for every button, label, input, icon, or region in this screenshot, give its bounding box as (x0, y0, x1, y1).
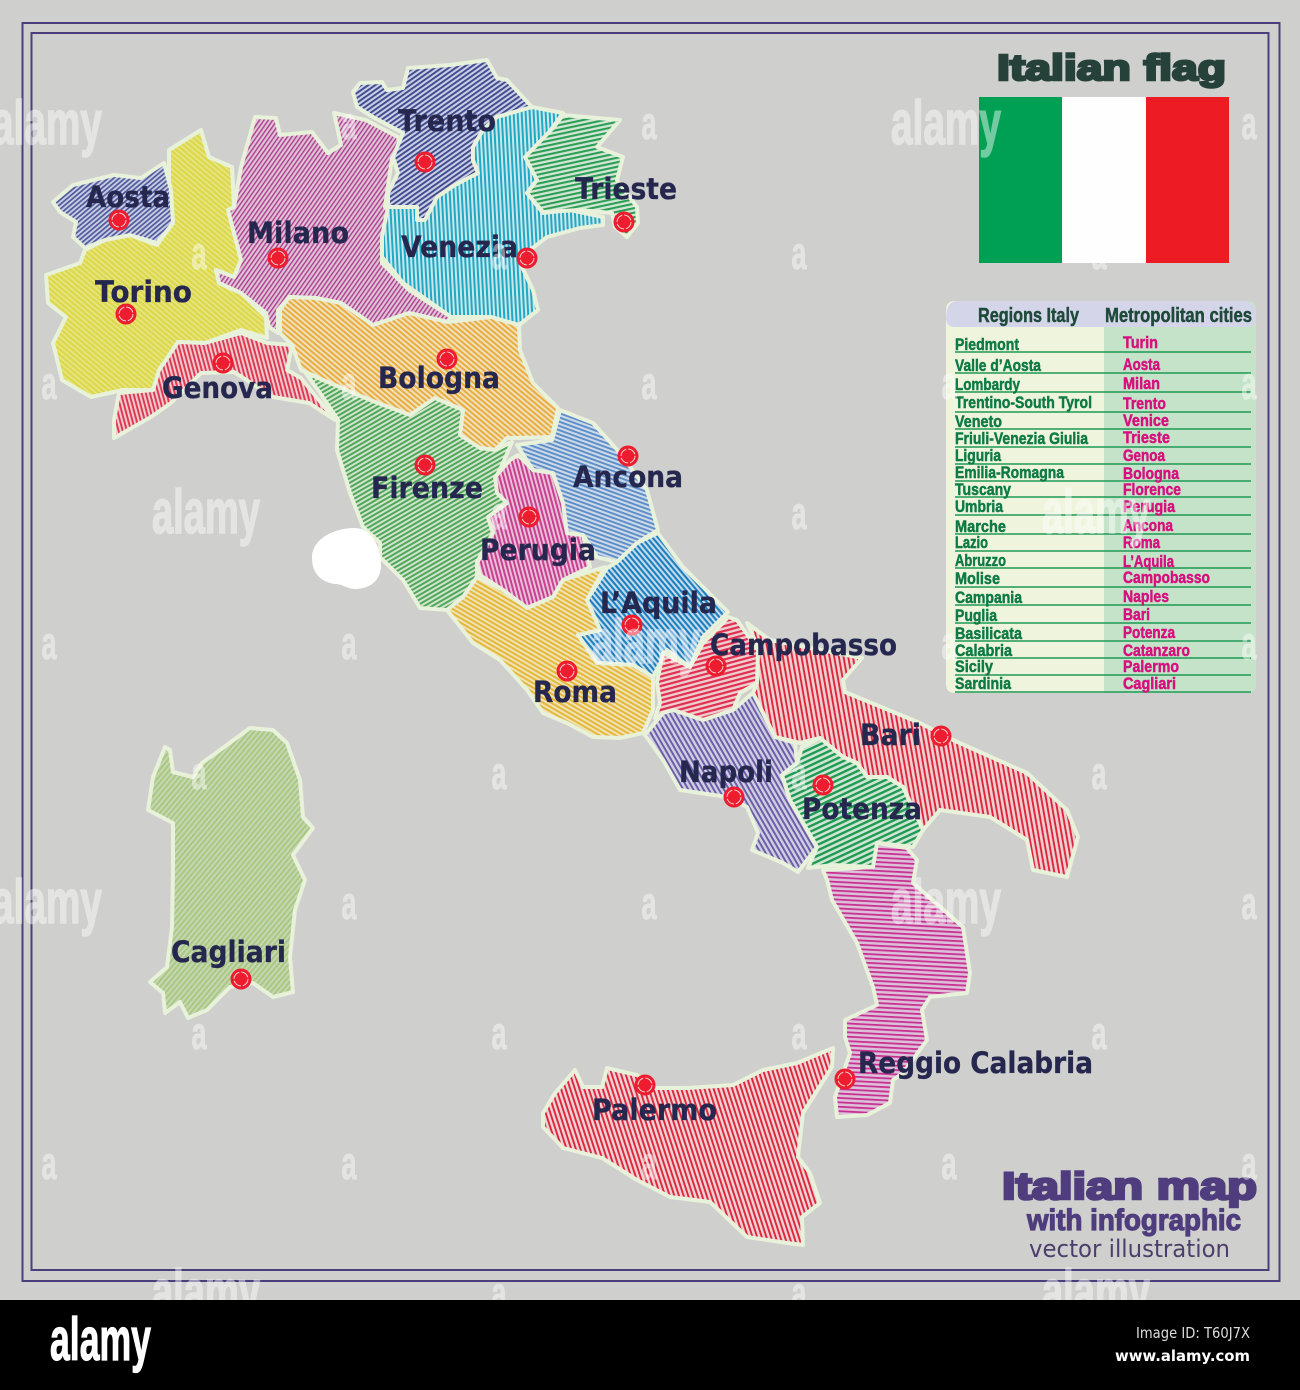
city: Ancona (573, 446, 683, 494)
city: Trento: Trento (398, 104, 496, 138)
row: Lombardy: Milan (1123, 374, 1160, 393)
region: Valle d'Aosta (53, 163, 173, 248)
watermark layer: a (1092, 747, 1107, 799)
title: Italian map: Italian map (1002, 1166, 1257, 1208)
city: Reggio Calabria: Reggio Calabria (858, 1046, 1093, 1080)
row: Sicily: Sicily (955, 657, 993, 676)
footer logo: alamy: alamy (50, 1306, 151, 1373)
row: Veneto (955, 411, 1251, 431)
row: Sicily: Palermo (1123, 657, 1179, 676)
city: Reggio Calabria (834, 1046, 1093, 1090)
watermark layer: a (942, 1137, 957, 1189)
city: Perugia: Perugia (480, 533, 596, 567)
row: Basilicata: Basilicata (955, 624, 1022, 643)
watermark layer: a (42, 357, 57, 409)
row: Emilia-Romagna (955, 463, 1251, 483)
watermark layer: a (1242, 1137, 1257, 1189)
Italian flag (979, 97, 1229, 263)
city: Genova: Genova (162, 371, 273, 405)
header: Metropolitan cities: Metropolitan cities (1105, 305, 1252, 327)
city: Potenza (802, 774, 922, 826)
row: Valle d'Aosta: Valle d’Aosta (955, 356, 1041, 375)
row: Lazio (955, 533, 1251, 552)
row: Tuscany: Tuscany (955, 480, 1011, 499)
city: Cagliari: Cagliari (171, 935, 286, 969)
watermark layer: a (642, 357, 657, 409)
region: Umbria (477, 455, 590, 608)
region: Tuscany (305, 372, 512, 610)
watermark layer: a (792, 487, 807, 539)
row: Puglia: Bari (1123, 605, 1150, 624)
watermark layer: a (192, 1007, 207, 1059)
row: Liguria: Liguria (955, 446, 1001, 465)
row: Molise (955, 568, 1251, 588)
row: Puglia: Puglia (955, 606, 997, 625)
row: Calabria (955, 641, 1251, 660)
row: Abruzzo: Abruzzo (955, 551, 1006, 570)
row: Lombardy (955, 374, 1251, 394)
region: Molise (655, 617, 758, 720)
row: Campania (955, 587, 1251, 607)
city: Firenze: Firenze (371, 471, 483, 505)
row: Marche (955, 516, 1251, 536)
row: Sardinia: Sardinia (955, 674, 1011, 693)
watermark layer: a (492, 1267, 507, 1319)
region: Friuli-Venezia Giulia (525, 115, 638, 237)
row: Valle d'Aosta (955, 355, 1251, 375)
city: L'Aquila (600, 586, 717, 636)
row: Emilia-Romagna: Bologna (1123, 464, 1179, 483)
table right background (1104, 301, 1256, 693)
city: Campobasso (706, 628, 897, 676)
city: Milano: Milano (247, 216, 349, 250)
watermark layer: a (42, 617, 57, 669)
watermark layer: a (792, 1267, 807, 1319)
region: Sicily (543, 1048, 833, 1245)
row: Tuscany: Florence (1123, 480, 1181, 499)
city: Campobasso: Campobasso (710, 628, 897, 662)
watermark layer: alamy (1042, 1258, 1150, 1327)
watermark layer: a (1242, 357, 1257, 409)
watermark layer: a (942, 357, 957, 409)
row: Marche: Ancona (1123, 516, 1173, 535)
watermark layer: a (642, 877, 657, 929)
row: Campania: Naples (1123, 587, 1169, 606)
row: Trentino-South Tyrol (955, 393, 1251, 413)
footer band (0, 1300, 1300, 1390)
city: Perugia (480, 506, 596, 567)
city: Aosta: Aosta (86, 180, 170, 214)
row: Basilicata (955, 623, 1251, 643)
region: Abruzzo (578, 533, 728, 677)
row: Calabria: Calabria (955, 641, 1012, 660)
city: Trento (398, 104, 496, 172)
row: Marche: Marche (955, 517, 1006, 536)
watermark layer: a (642, 1137, 657, 1189)
region: Veneto (382, 107, 603, 325)
table left background (946, 301, 1104, 693)
table: regions and metropolitan cities (946, 301, 1256, 693)
row: Puglia (955, 605, 1251, 625)
watermark layer: alamy (152, 478, 260, 547)
region: Lombardy (216, 113, 451, 333)
watermark layer: a (1242, 617, 1257, 669)
watermark layer: alamy (891, 89, 1001, 158)
row: Friuli-Venezia Giulia (955, 428, 1251, 448)
row: Piedmont: Piedmont (955, 335, 1019, 354)
region: Liguria (114, 333, 335, 438)
city: Ancona: Ancona (573, 460, 683, 494)
row: Calabria: Catanzaro (1123, 641, 1190, 660)
watermark layer: a (1242, 877, 1257, 929)
watermark layer: a (492, 227, 507, 279)
city: Napoli: Napoli (679, 755, 773, 789)
row: Lazio: Roma (1123, 533, 1160, 552)
watermark layer: alamy (592, 608, 700, 677)
city: Bologna (378, 348, 500, 395)
watermark layer: alamy (152, 1258, 260, 1327)
city: Genova (162, 352, 273, 405)
caption: vector illustration: vector illustration (1029, 1235, 1230, 1263)
row: Friuli-Venezia Giulia: Friuli-Venezia Giulia (955, 429, 1088, 448)
row: Friuli-Venezia Giulia: Trieste (1123, 428, 1170, 447)
row: Liguria (955, 446, 1251, 465)
watermark layer: a (342, 97, 357, 149)
watermark layer: a (42, 1137, 57, 1189)
row: Valle d'Aosta: Aosta (1123, 355, 1160, 374)
row: Sardinia (955, 674, 1251, 693)
row: Veneto: Veneto (955, 412, 1002, 431)
watermark layer: a (792, 227, 807, 279)
watermark layer: a (342, 357, 357, 409)
city: Torino: Torino (95, 275, 192, 309)
watermark layer: a (942, 617, 957, 669)
city: Bari: Bari (860, 718, 921, 752)
subtitle: with infographic: with infographic (1026, 1204, 1241, 1237)
city: Milano (247, 216, 349, 268)
row: Umbria: Umbria (955, 497, 1003, 516)
row: Molise: Molise (955, 569, 1000, 588)
row: Liguria: Genoa (1123, 446, 1165, 465)
city: Napoli (679, 755, 773, 808)
row: Umbria: Perugia (1123, 497, 1175, 516)
row: Tuscany (955, 480, 1251, 499)
region: Puglia (747, 623, 1078, 877)
city: Venezia: Venezia (401, 230, 518, 264)
city: Firenze (371, 454, 483, 505)
region: Campania (645, 693, 817, 872)
row: Sardinia: Cagliari (1123, 674, 1176, 693)
row: Basilicata: Potenza (1123, 623, 1175, 642)
watermark layer: alamy (1042, 478, 1150, 547)
row: Veneto: Venice (1123, 411, 1169, 430)
watermark layer: a (492, 747, 507, 799)
city: Trieste (575, 172, 677, 232)
watermark layer: a (192, 227, 207, 279)
watermark layer: a (342, 1137, 357, 1189)
region: Calabria (823, 843, 970, 1117)
city: Potenza: Potenza (802, 792, 922, 826)
row: Lazio: Lazio (955, 533, 988, 552)
city: Cagliari (171, 935, 286, 990)
row: Trentino-South Tyrol: Trento (1123, 394, 1166, 413)
row: Abruzzo: L’Aquila (1123, 552, 1174, 571)
row: Molise: Campobasso (1123, 568, 1210, 587)
row: Trentino-South Tyrol: Trentino-South Tyrol (955, 393, 1092, 412)
row: Piedmont (955, 333, 1251, 354)
watermark layer: a (792, 1007, 807, 1059)
watermark layer: a (192, 747, 207, 799)
watermark layer: a (492, 487, 507, 539)
city: Torino (95, 275, 192, 324)
watermark layer: a (642, 97, 657, 149)
watermark layer: alamy (891, 868, 1001, 937)
footer: image id: Image ID: T60J7X (1136, 1324, 1250, 1342)
row: Campania: Campania (955, 588, 1022, 607)
region: Piedmont (46, 130, 267, 397)
row: Sicily (955, 657, 1251, 676)
region: Lazio (447, 567, 653, 738)
city: Roma: Roma (533, 675, 617, 709)
footer: website: www.alamy.com (1115, 1347, 1250, 1365)
watermark layer: a (342, 877, 357, 929)
row: Emilia-Romagna: Emilia-Romagna (955, 463, 1064, 482)
watermark layer: a (1242, 97, 1257, 149)
row: Piedmont: Turin (1123, 333, 1158, 352)
table header band (946, 301, 1256, 327)
heading: Italian flag: Italian flag (997, 47, 1226, 88)
city: Palermo (592, 1074, 717, 1127)
city: Aosta (86, 180, 170, 230)
header: Regions Italy: Regions Italy (978, 305, 1080, 327)
watermark layer: a (1092, 227, 1107, 279)
city: Bologna: Bologna (378, 361, 500, 395)
city: Palermo: Palermo (592, 1093, 717, 1127)
region: Emilia-Romagna (280, 297, 558, 450)
watermark layer: a (792, 747, 807, 799)
row: Umbria (955, 497, 1251, 516)
white blob near Elba (312, 528, 381, 589)
watermark layer: a (342, 617, 357, 669)
region: Trentino-South Tyrol (353, 60, 532, 220)
region: Basilicata (782, 738, 923, 868)
city: Roma (533, 660, 617, 709)
region: Sardinia (148, 728, 313, 1018)
map of Italy (46, 60, 1078, 1245)
city: L'Aquila: L’Aquila (600, 586, 717, 620)
watermark layer: a (492, 1007, 507, 1059)
region: Marche (517, 410, 658, 562)
row: Abruzzo (955, 551, 1251, 571)
watermark layer: a (1092, 1007, 1107, 1059)
city: Trieste: Trieste (575, 172, 677, 206)
row: Lombardy: Lombardy (955, 375, 1020, 394)
